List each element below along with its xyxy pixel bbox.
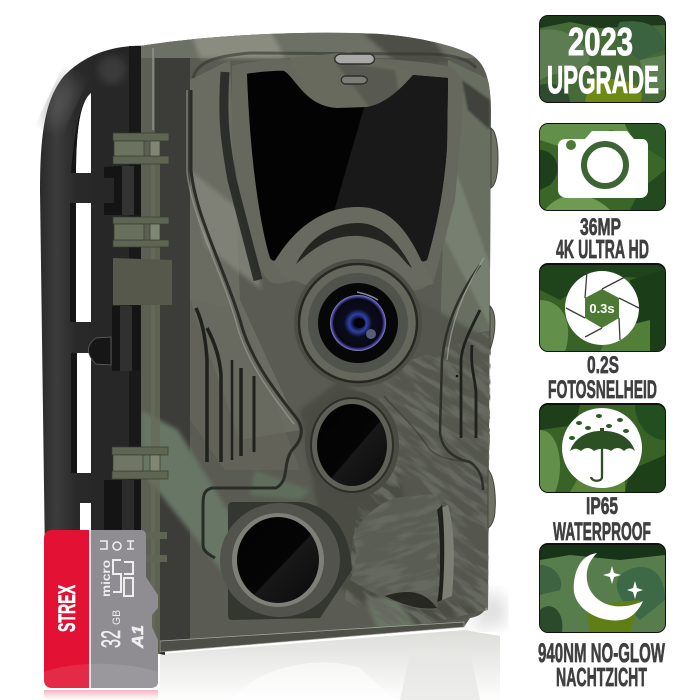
camouflage top band patch <box>290 52 412 112</box>
camera mounting strap frame <box>39 46 150 560</box>
reflection under the camera <box>160 590 505 700</box>
camouflage streak texture <box>345 333 491 624</box>
body ridge lines <box>153 48 484 558</box>
side buttons <box>488 128 498 528</box>
badge: 2023 upgrade <box>539 15 666 103</box>
badge: waterproof <box>539 403 666 493</box>
card reflection <box>44 690 158 700</box>
lower black hinge <box>104 480 141 535</box>
bottom bracket <box>145 532 167 562</box>
long rail <box>151 164 160 654</box>
badge: camera <box>539 123 666 211</box>
hinge and latch assembly <box>88 133 172 654</box>
camera body <box>141 32 491 652</box>
lower housing block <box>228 502 352 620</box>
latch block <box>113 258 172 305</box>
left vent slots <box>196 308 254 462</box>
centre infrared sensor <box>305 391 399 499</box>
badge: night vision <box>539 543 666 633</box>
icon: moon and stars <box>574 553 643 620</box>
PIR motion sensor <box>350 494 454 610</box>
label: IP65: IP65 <box>586 493 618 520</box>
SDHC mark <box>113 560 133 596</box>
camouflage patches <box>141 30 500 660</box>
badge: shutter speed <box>539 263 666 352</box>
rear housing <box>91 46 165 655</box>
second green bracket <box>113 217 169 247</box>
speed class: A1 <box>130 625 147 649</box>
lower green bracket <box>112 447 168 479</box>
status indicator top <box>335 54 374 84</box>
micro SD card <box>44 530 158 700</box>
lower infrared sensor <box>220 503 340 617</box>
icon: camera <box>558 131 648 198</box>
lens assembly <box>294 259 422 387</box>
arch over the lens <box>274 207 434 290</box>
label: 36MP: 36MP <box>580 214 621 241</box>
micro label: micro <box>99 560 113 597</box>
label: 0.2S: 0.2S <box>587 352 619 379</box>
UHS marks <box>100 541 134 550</box>
lower hinge and peg <box>112 306 140 371</box>
window surround <box>232 58 463 291</box>
brand: STREX <box>54 585 81 632</box>
upper black hinge <box>104 165 141 215</box>
capacity: 32 <box>96 630 126 648</box>
capacity unit: GB <box>111 610 123 625</box>
base lip <box>160 622 464 652</box>
badge text: 2023 <box>568 21 633 64</box>
window groove <box>224 72 258 280</box>
infrared window <box>247 70 460 270</box>
right vent slots <box>456 310 480 438</box>
upper green bracket <box>113 133 169 164</box>
aperture label: 0.3s <box>589 301 615 316</box>
icon: umbrella in rain <box>562 408 642 488</box>
